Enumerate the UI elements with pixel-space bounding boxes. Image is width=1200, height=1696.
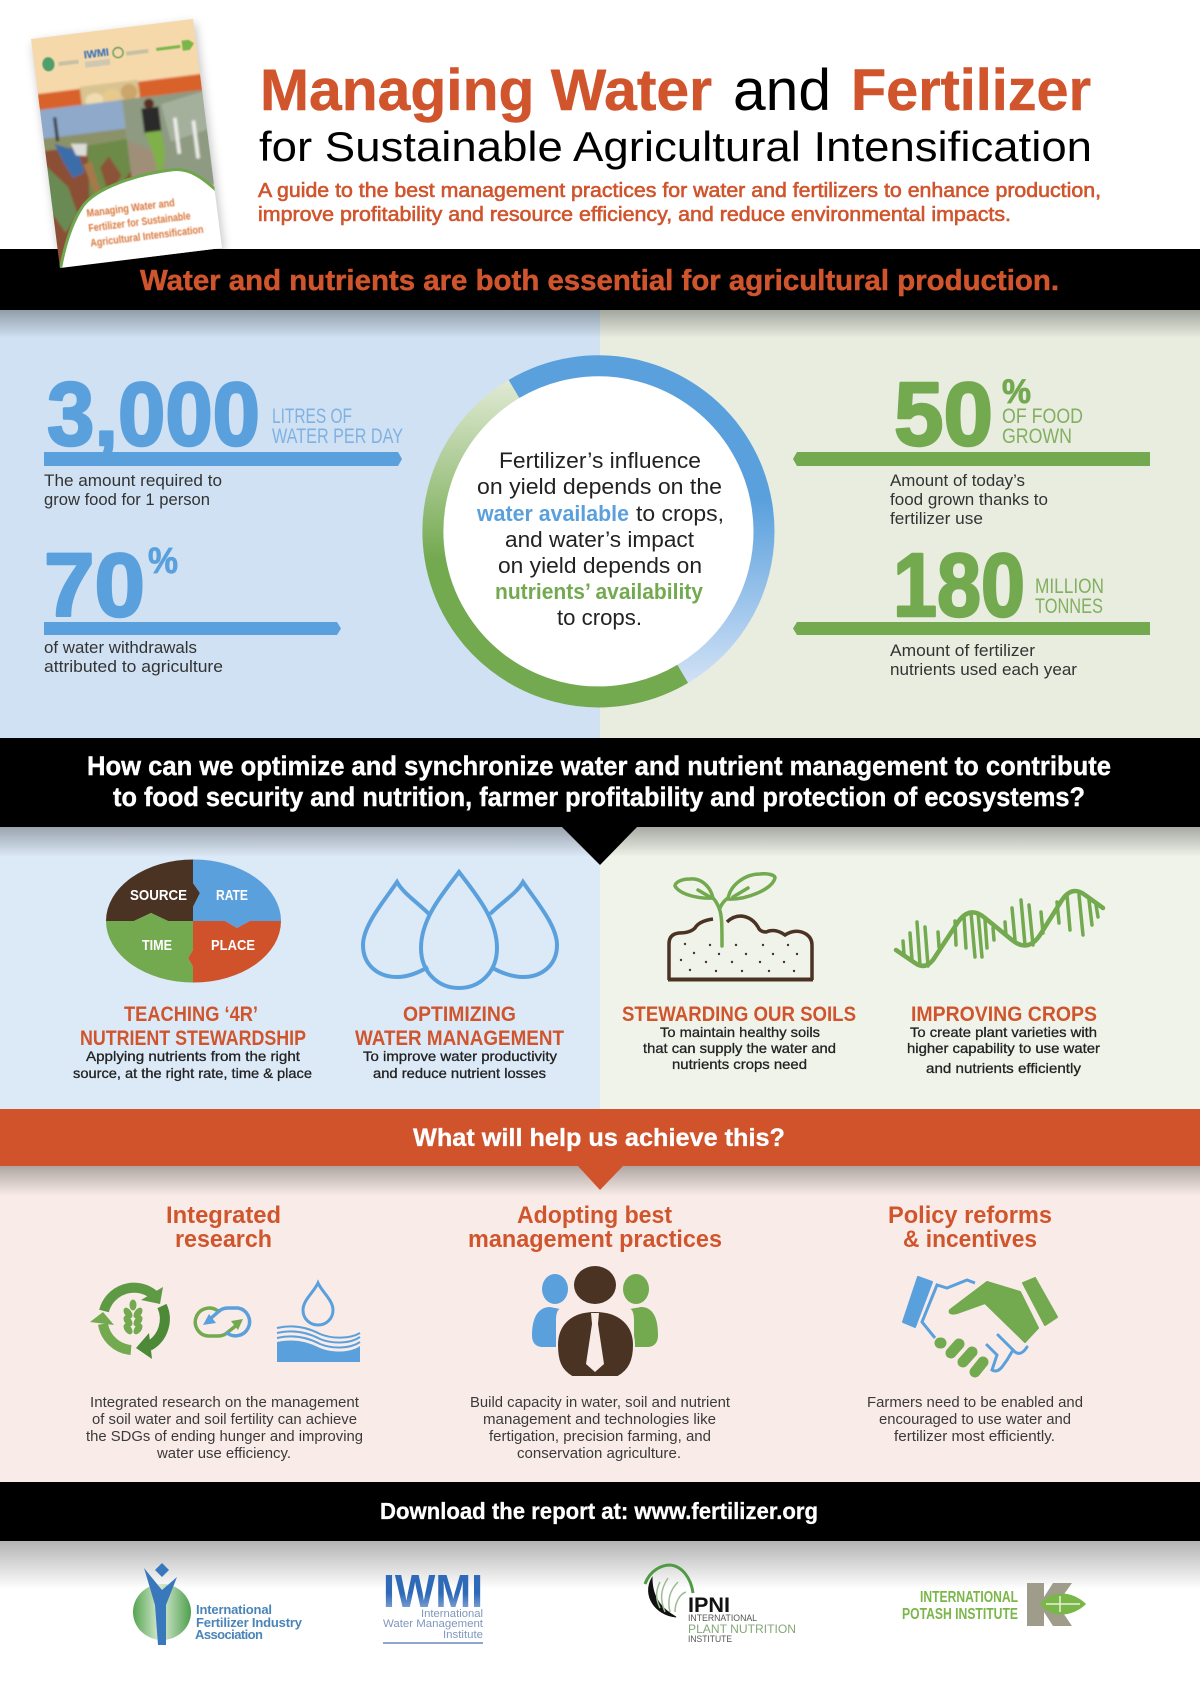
action: soils: To maintain healthy soils bbox=[660, 1024, 820, 1040]
column: policy heading: & incentives bbox=[903, 1226, 1037, 1253]
icon: water drop and waves bbox=[277, 1283, 360, 1362]
stat: 50%: GROWN bbox=[1002, 425, 1072, 448]
icon: three water drops bbox=[363, 872, 557, 988]
stat: 3,000 litres: grow food for 1 person bbox=[44, 490, 210, 509]
action: soils: STEWARDING OUR SOILS bbox=[622, 1003, 856, 1026]
icon: recycling wheat bbox=[90, 1287, 165, 1359]
stat: 180 million tonnes bbox=[793, 536, 1150, 679]
action: crops: and nutrients efficiently bbox=[926, 1060, 1081, 1076]
title line 1: and bbox=[733, 58, 831, 123]
cover title: Managing Water and bbox=[86, 197, 175, 220]
black banner: essential bbox=[0, 249, 1200, 310]
central circle bbox=[433, 366, 764, 697]
logo: IFA: Association bbox=[195, 1627, 263, 1642]
logo: IWMI: IWMI bbox=[383, 1565, 483, 1617]
stat: 180 million tonnes: MILLION bbox=[1035, 575, 1104, 598]
column text: policy: encouraged to use water and bbox=[879, 1411, 1071, 1428]
stat: 50%: fertilizer use bbox=[890, 509, 983, 528]
cover mini logos bbox=[41, 36, 195, 73]
stat: 50%: food grown thanks to bbox=[890, 490, 1048, 509]
black banner: question: to food security and nutrition, farmer profitability and protection of ecosystems? bbox=[113, 782, 1085, 812]
stat: 50%: OF FOOD bbox=[1002, 405, 1083, 428]
column text: integrated research: of soil water and soil fertility can achieve bbox=[92, 1411, 357, 1428]
column text: best practices: fertigation, precision farming, and bbox=[489, 1428, 711, 1445]
action: water management: OPTIMIZING bbox=[403, 1003, 516, 1026]
cover title bbox=[86, 194, 204, 250]
title bbox=[259, 58, 1092, 170]
action: soils: nutrients crops need bbox=[672, 1056, 807, 1072]
icon: seedling in soil bbox=[668, 874, 813, 980]
panel: four actions bbox=[0, 827, 1200, 1110]
stat: 70%: % bbox=[148, 540, 178, 581]
logo: IPNI: INSTITUTE bbox=[688, 1634, 732, 1644]
action: crops bbox=[907, 1003, 1100, 1076]
title line 1: Fertilizer bbox=[851, 58, 1091, 123]
action: soils bbox=[622, 1003, 856, 1072]
stat: 3,000 litres bbox=[44, 365, 403, 509]
logo: IWMI bbox=[383, 1565, 483, 1644]
icon: 4R pie: PLACE bbox=[211, 937, 255, 954]
cover title: Fertilizer for Sustainable bbox=[88, 210, 191, 235]
column: best practices heading bbox=[468, 1202, 722, 1253]
action: crops: IMPROVING CROPS bbox=[911, 1003, 1097, 1026]
panel background: right bbox=[600, 827, 1200, 1110]
stat: 50%: 50 bbox=[894, 365, 993, 465]
column: best practices heading: management practices bbox=[468, 1226, 722, 1253]
logo: IFA: Fertilizer Industry bbox=[196, 1615, 303, 1630]
icon: 4R pie: SOURCE bbox=[130, 887, 187, 904]
black banner: download: Download the report at: www.fertilizer.org bbox=[380, 1498, 818, 1524]
stat: 180 million tonnes: 180 bbox=[893, 536, 1025, 636]
logo: IPNI: PLANT NUTRITION bbox=[688, 1622, 796, 1636]
centre text: on yield depends on the bbox=[477, 474, 722, 499]
orange banner: What will help us achieve this? bbox=[413, 1124, 785, 1152]
black banner: question bbox=[0, 738, 1200, 865]
panel background: water side bbox=[0, 310, 600, 739]
logo: IWMI: Institute bbox=[443, 1629, 483, 1641]
orange banner bbox=[0, 1109, 1200, 1190]
action: water management: and reduce nutrient losses bbox=[373, 1065, 546, 1081]
logo: IFA: International bbox=[196, 1602, 272, 1617]
centre text: nutrients’ availability bbox=[495, 579, 704, 604]
column text: integrated research: water use efficiency. bbox=[156, 1445, 291, 1462]
action: 4R stewardship: Applying nutrients from the right bbox=[86, 1048, 300, 1064]
stat: 3,000 litres: The amount required to bbox=[44, 471, 222, 490]
column text: policy: fertilizer most efficiently. bbox=[894, 1428, 1055, 1445]
stat: 70%: 70 bbox=[44, 536, 145, 636]
panel: water and nutrient stats bbox=[0, 310, 1200, 739]
column: integrated research heading: research bbox=[175, 1226, 272, 1253]
stat: 3,000 litres: LITRES OF bbox=[272, 405, 352, 428]
icon: infinity loop bbox=[195, 1308, 250, 1336]
action: crops: To create plant varieties with bbox=[910, 1024, 1097, 1040]
title line 1: Managing Water bbox=[260, 58, 712, 123]
stat: 50%: Amount of today’s bbox=[890, 471, 1025, 490]
action: 4R stewardship bbox=[73, 1003, 312, 1081]
stat: 70% bbox=[44, 536, 341, 676]
centre text: water available bbox=[476, 501, 629, 526]
stat: 50% bbox=[793, 365, 1150, 528]
column: integrated research heading bbox=[166, 1202, 281, 1253]
action: crops: higher capability to use water bbox=[907, 1040, 1100, 1056]
action: 4R stewardship: NUTRIENT STEWARDSHIP bbox=[80, 1027, 306, 1050]
stat: 3,000 litres: 3,000 bbox=[47, 365, 260, 465]
logo: IPNI bbox=[645, 1565, 796, 1644]
footer shadow bbox=[0, 1541, 1200, 1589]
logo: IFA bbox=[133, 1563, 303, 1645]
logo: IPNI: INTERNATIONAL bbox=[688, 1613, 757, 1623]
action: 4R stewardship: source, at the right rate, time & place bbox=[73, 1065, 312, 1081]
centre text: Fertilizer’s influence bbox=[499, 448, 701, 473]
stat: 70%: attributed to agriculture bbox=[44, 657, 223, 676]
logo: International Potash Institute bbox=[902, 1583, 1086, 1626]
stat: 70%: of water withdrawals bbox=[44, 638, 197, 657]
subtitle: improve profitability and resource efficiency, and reduce environmental impacts. bbox=[258, 204, 1011, 226]
cover mini logos: IWMI bbox=[83, 47, 110, 62]
centre text: to crops, bbox=[636, 501, 724, 526]
logo: IWMI: Water Management bbox=[383, 1618, 483, 1630]
column text: integrated research: the SDGs of ending hunger and improving bbox=[86, 1428, 363, 1445]
black banner: download bbox=[0, 1482, 1200, 1541]
title line 1 bbox=[260, 58, 1091, 123]
icon: 4R pie: RATE bbox=[216, 887, 248, 904]
column: integrated research heading: Integrated bbox=[166, 1202, 281, 1229]
column: policy heading bbox=[888, 1202, 1052, 1253]
panel background bbox=[0, 1166, 1200, 1482]
column text: best practices: management and technologies like bbox=[483, 1411, 716, 1428]
action: water management bbox=[355, 1003, 564, 1081]
stat: 180 million tonnes: Amount of fertilizer bbox=[890, 641, 1035, 660]
action: 4R stewardship: TEACHING ‘4R’ bbox=[124, 1003, 258, 1026]
logo: International Potash Institute: POTASH INSTITUTE bbox=[902, 1606, 1018, 1623]
subtitle bbox=[258, 180, 1101, 226]
column text: best practices: conservation agriculture. bbox=[517, 1445, 681, 1462]
centre text: and water’s impact bbox=[505, 527, 694, 552]
icon: handshake bbox=[903, 1277, 1057, 1372]
column text: best practices bbox=[470, 1394, 731, 1462]
panel: what will help bbox=[0, 1166, 1200, 1482]
cover title: Agricultural Intensification bbox=[90, 224, 204, 250]
panel background: left bbox=[0, 827, 600, 1110]
logo: IPNI: IPNI bbox=[688, 1594, 730, 1617]
logo: International Potash Institute: INTERNATIONAL bbox=[920, 1589, 1018, 1606]
stat: 3,000 litres: WATER PER DAY bbox=[272, 425, 403, 448]
stat: 50%: % bbox=[1002, 373, 1031, 411]
centre text: on yield depends on bbox=[498, 553, 702, 578]
logo: IWMI: International bbox=[421, 1608, 483, 1620]
action: water management: To improve water productivity bbox=[363, 1048, 557, 1064]
action: water management: WATER MANAGEMENT bbox=[355, 1027, 564, 1050]
centre text: to crops. bbox=[557, 605, 642, 630]
icon: three people bbox=[532, 1266, 658, 1377]
stat: 180 million tonnes: nutrients used each year bbox=[890, 660, 1077, 679]
report cover bbox=[28, 16, 226, 274]
black banner: essential: Water and nutrients are both essential for agricultural production. bbox=[140, 265, 1059, 297]
column text: integrated research: Integrated research on the management bbox=[90, 1394, 360, 1411]
column: policy heading: Policy reforms bbox=[888, 1202, 1052, 1229]
column text: policy: Farmers need to be enabled and bbox=[867, 1394, 1083, 1411]
icon: 4R pie: TIME bbox=[142, 937, 172, 954]
action: soils: that can supply the water and bbox=[643, 1040, 836, 1056]
column: best practices heading: Adopting best bbox=[517, 1202, 672, 1229]
icon: DNA helix bbox=[896, 891, 1103, 966]
centre text bbox=[476, 448, 724, 630]
icon: 4R pie bbox=[106, 860, 281, 982]
column text: integrated research bbox=[86, 1394, 363, 1462]
stat: 180 million tonnes: TONNES bbox=[1035, 595, 1103, 618]
black banner: question: How can we optimize and synchronize water and nutrient management to contribute bbox=[87, 751, 1111, 781]
column text: policy bbox=[867, 1394, 1083, 1445]
title line 2: for Sustainable Agricultural Intensification bbox=[259, 123, 1092, 170]
column text: best practices: Build capacity in water, soil and nutrient bbox=[470, 1394, 731, 1411]
subtitle: A guide to the best management practices for water and fertilizers to enhance production, bbox=[258, 180, 1101, 202]
panel background: nutrient side bbox=[600, 310, 1200, 739]
